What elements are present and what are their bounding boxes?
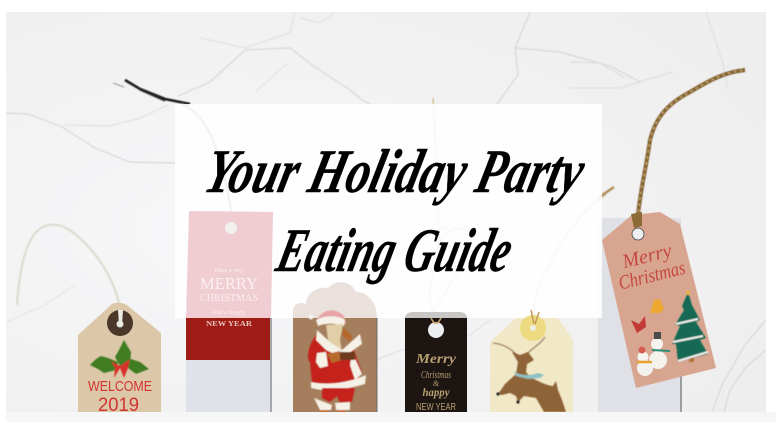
icon: holly leaves and bow [90, 340, 149, 378]
tag: black merry christmas and happy new year [405, 312, 467, 413]
eyelet and knot [632, 228, 644, 240]
tag body [293, 318, 377, 412]
icon: leaping deer [493, 337, 566, 412]
tag text: welcome 2019: WELCOME [88, 378, 152, 395]
title line 1: Your Holiday Party [199, 137, 593, 206]
white string [17, 225, 120, 312]
tag: merry christmas new year (pink and red): CHRISTMAS [200, 292, 258, 304]
tag: right kraft merry christmas [602, 70, 745, 388]
envelope behind right tag [598, 218, 681, 412]
twine [637, 70, 745, 224]
twine end of deer tag [598, 187, 614, 198]
tag body [602, 212, 716, 388]
tag: black merry christmas and happy new year: Christmas [421, 370, 451, 381]
title [199, 137, 593, 285]
scalloped top [293, 282, 377, 318]
red band [186, 318, 271, 360]
string and hole [225, 222, 237, 234]
tag: merry christmas new year (pink and red) [186, 211, 273, 412]
tag body [405, 318, 467, 412]
tag: welcome 2019 [17, 225, 161, 416]
eyelet [520, 315, 546, 341]
santa figure [308, 310, 366, 412]
tag: welcome 2019: 2019 [98, 395, 139, 416]
tag: santa [293, 282, 378, 412]
icon: snowmen [637, 332, 670, 376]
tag script lettering: Christmas [616, 257, 688, 295]
tag: reindeer [490, 310, 573, 412]
title line 2: Eating Guide [270, 216, 520, 285]
eyelet [107, 310, 133, 336]
paper lower section [186, 360, 270, 412]
tag: merry christmas new year (pink and red): MERRY [200, 274, 258, 293]
tag: black merry christmas and happy new year: NEW YEAR [416, 402, 456, 413]
tag: merry christmas new year (pink and red): NEW YEAR [206, 320, 253, 328]
tag body [78, 303, 161, 412]
bottom strip [6, 412, 776, 422]
tag: black merry christmas and happy new year: happy [422, 385, 450, 399]
black string of the pink tag [113, 80, 233, 222]
icon: bow [631, 316, 646, 333]
tag body [490, 318, 573, 412]
cream threads under the panel [360, 98, 606, 322]
pink tag top [186, 211, 273, 318]
tag text: Have a very [214, 268, 244, 274]
gold lettering: Merry [415, 352, 457, 367]
icon: christmas tree [672, 291, 708, 362]
tag script lettering [620, 247, 685, 289]
top fading section [405, 312, 467, 318]
tag script lettering: Merry [619, 240, 674, 273]
tag: black merry christmas and happy new year: & [433, 379, 440, 388]
panel: translucent white title backing [175, 104, 602, 318]
hole with string [428, 322, 444, 338]
icon: bell [650, 299, 664, 313]
tag: merry christmas new year (pink and red): and a happy [213, 309, 245, 316]
